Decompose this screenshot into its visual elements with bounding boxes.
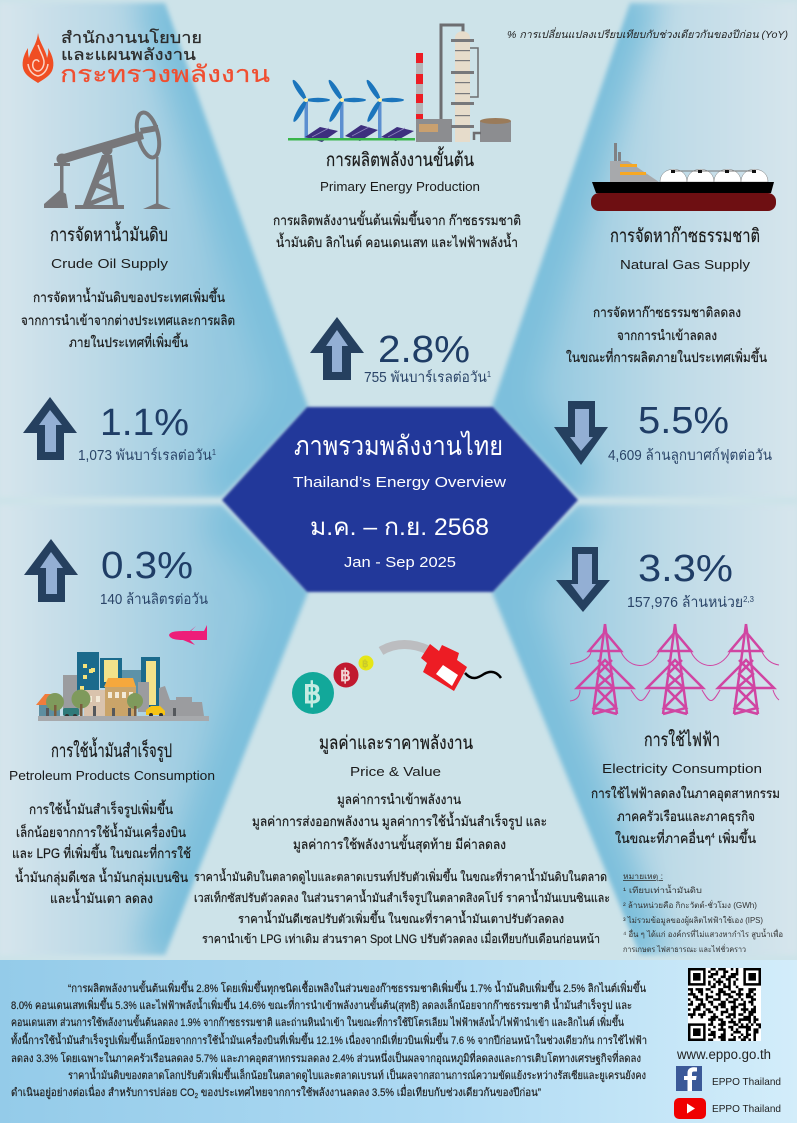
panel: natural gas background [490, 0, 704, 500]
stat: petroleum [100, 545, 208, 608]
icon: flame logo [23, 33, 53, 83]
text: electricity description: เพิ่มขึ้น [715, 828, 756, 846]
stat: crude oil [78, 402, 217, 464]
icon: wind turbines and solar [288, 79, 415, 142]
text: price description: ราคานำเข้า LPG เท่าเดิม ส่วนราคา Spot LNG ปรับตัวลดลง เมื่อเทียบกับเดือนก่อนหน้า [202, 930, 600, 946]
stat: petroleum: 0.3% [101, 545, 193, 587]
text: price description: ราคาน้ำมันดีเซลปรับตัวเพิ่มขึ้น ในขณะที่ราคาน้ำมันเตาปรับตัวลดลง [238, 910, 564, 926]
icon: LNG ship [591, 143, 776, 211]
panel: summary band [0, 960, 797, 1123]
icon: facebook [676, 1066, 702, 1091]
notes: ⁴ อื่น ๆ ได้แก่ องค์กรที่ไม่แสวงหากำไร สูบน้ำเพื่อ [623, 928, 783, 940]
heading: crude oil: การจัดหาน้ำมันดิบ [50, 221, 168, 245]
icon: baht coins and fuel nozzle: ฿ [362, 659, 368, 670]
panel: electricity background [490, 502, 704, 958]
QR code [688, 968, 761, 1041]
text: crude oil description: จากการนำเข้าจากต่างประเทศและการผลิต [21, 313, 235, 328]
text: summary: 2 [195, 1093, 198, 1100]
notes [623, 872, 783, 954]
text: crude oil description: การจัดหาน้ำมันดิบของประเทศเพิ่มขึ้น [33, 287, 225, 305]
stat: natural gas: 4,609 ล้านลูกบาศก์ฟุตต่อวัน [608, 447, 772, 464]
stat: crude oil: 1,073 พันบาร์เรลต่อวัน [78, 448, 221, 464]
icon: baht coins and fuel nozzle: ฿ [340, 666, 351, 685]
text: petroleum description: การใช้น้ำมันสำเร็จรูปเพิ่มขึ้น [29, 799, 173, 818]
text: petroleum description: และ LPG ที่เพิ่มขึ้น ในขณะที่การใช้ [12, 843, 191, 861]
notes: ³ ไม่รวมข้อมูลของผู้ผลิตไฟฟ้าใช้เอง (IPS) [623, 916, 763, 926]
hexagon period Thai: ม.ค. – ก.ย. 2568 [310, 514, 489, 541]
heading: natural gas: การจัดหาก๊าซธรรมชาติ [610, 225, 760, 246]
text: price description: ราคาน้ำมันดิบในตลาดดูไบและตลาดเบรนท์ปรับตัวเพิ่มขึ้น ในขณะที่ราคาน้ำมันดิบในตลาด [194, 868, 607, 885]
stat: electricity [627, 548, 755, 611]
notes: หมายเหตุ : [623, 872, 663, 881]
icon: arrow up petroleum [24, 539, 78, 602]
icon: baht coins and fuel nozzle [292, 644, 501, 714]
stat: electricity: 157,976 ล้านหน่วย [627, 595, 746, 611]
hexagon subtitle: Thailand’s Energy Overview [293, 474, 506, 491]
logo name line 1: สำนักงานนโยบาย [61, 28, 202, 47]
stat: primary [364, 329, 492, 386]
icon: power pylons [570, 624, 779, 714]
icon: arrow down electricity [556, 547, 610, 612]
stat: primary: 755 พันบาร์เรลต่อวัน [364, 370, 495, 386]
hexagon period English: Jan - Sep 2025 [344, 554, 456, 571]
logo name line 2: และแผนพลังงาน [61, 47, 196, 64]
text: primary energy description: การผลิตพลังงานขั้นต้นเพิ่มขึ้นจาก ก๊าซธรรมชาติ [273, 210, 521, 228]
text: electricity description: ในขณะที่ภาคอื่นๆ [615, 831, 719, 846]
text: value description: มูลค่าการใช้พลังงานขั้นสุดท้าย มีค่าลดลง [293, 834, 506, 853]
stat: crude oil: 1.1% [100, 402, 189, 444]
text: price description: เวสเท็กซัสปรับตัวลดลง ในส่วนราคาน้ำมันสำเร็จรูปในตลาดสิงคโปร์ ราคาน้ำมันเบนซินและ [194, 889, 610, 906]
central hexagon [222, 407, 578, 592]
panel: crude oil background [65, 0, 310, 500]
stat: crude oil: 1 [212, 448, 217, 457]
text: petroleum description: เล็กน้อยจากการใช้น้ำมันเครื่องบิน [16, 822, 186, 840]
hexagon title: ภาพรวมพลังงานไทย [294, 431, 503, 461]
text: summary [11, 980, 647, 1100]
stat: petroleum: 140 ล้านลิตรต่อวัน [100, 591, 208, 608]
stat: primary: 1 [487, 370, 492, 379]
text: crude oil description [21, 287, 235, 350]
icon: city [36, 652, 209, 721]
text: summary: 8.0% คอนเดนเสทเพิ่มขึ้น 5.3% และไฟฟ้าพลังน้ำเพิ่มขึ้น 14.6% ขณะที่การนำเข้าพลังงานขั้นต้น(สุทธิ) ลดลงเล็กน้อยจากก๊าซธรรมชาติ น้ำมันสำเร็จรูป และ [11, 997, 632, 1012]
icon: refinery [416, 25, 511, 142]
icon: arrow down gas [554, 401, 608, 465]
text: summary: คอนเดนเสท ส่วนการใช้พลังงานขั้นต้นลดลง 1.9% จากก๊าซธรรมชาติ และถ่านหินนำเข้า ในขณะที่การใช้ปิโตรเลียม ไฟฟ้าพลังน้ำ/ไฟฟ้านำเข้า และลิกไนต์ เพิ่มขึ้น [11, 1014, 624, 1029]
heading: primary energy: การผลิตพลังงานขั้นต้น [326, 146, 474, 170]
subheading: primary energy: Primary Energy Production [320, 179, 480, 194]
YoY note: % การเปลี่ยนแปลงเปรียบเทียบกับช่วงเดียวกันของปีก่อน (YoY) [507, 27, 788, 41]
stat: natural gas [608, 400, 772, 464]
heading: electricity: การใช้ไฟฟ้า [644, 729, 720, 750]
icon: airplane [169, 625, 207, 645]
subheading: price and value: Price & Value [350, 764, 441, 779]
text: summary: ลดลง 3.3% โดยเฉพาะในภาคครัวเรือนลดลง 5.7% และภาคอุตสาหกรรมลดลง 2.4% ส่วนหนึ่งเป็นผลจากอุณหภูมิที่ลดลงและการเติบโตทางเศรษฐกิจที่ลดลง [11, 1050, 641, 1065]
text: summary: ดำเนินอยู่อย่างต่อเนื่อง สำหรับการปล่อย CO [11, 1087, 219, 1099]
text: crude oil description: ภายในประเทศที่เพิ่มขึ้น [69, 332, 188, 350]
text: primary energy description [273, 210, 521, 250]
subheading: petroleum: Petroleum Products Consumption [9, 768, 215, 783]
text: value description [252, 792, 547, 853]
text: electricity description: ภาคครัวเรือนและภาคธุรกิจ [617, 809, 755, 825]
text: petroleum description: น้ำมันกลุ่มดีเซล น้ำมันกลุ่มเบนซิน [15, 867, 188, 886]
logo [23, 28, 270, 87]
text: summary: ของประเทศไทยจากการใช้พลังงานลดลง 3.5% เมื่อเทียบกับช่วงเดียวกันของปีก่อน” [198, 1084, 541, 1099]
text: summary: ราคาน้ำมันดิบของตลาดโลกปรับตัวเพิ่มขึ้นเล็กน้อยในตลาดดูไบและตลาดเบรนท์ เป็นผลจากสถานการณ์ความขัดแย้งระหว่างรัสเซียและยูเครนยังคง [68, 1067, 646, 1082]
icon: baht coins and fuel nozzle: ฿ [303, 678, 321, 710]
website: www.eppo.go.th [676, 1047, 771, 1062]
notes: ² ล้านหน่วยคือ กิกะวัตต์-ชั่วโมง (GWh) [623, 899, 757, 910]
label: youtube: EPPO Thailand [712, 1103, 781, 1115]
text: electricity description: 4 [711, 833, 715, 840]
text: primary energy description: น้ำมันดิบ ลิกไนต์ คอนเดนเสท และไฟฟ้าพลังน้ำ [276, 232, 518, 250]
icon: arrow up primary [310, 317, 364, 380]
subheading: natural gas: Natural Gas Supply [620, 257, 751, 272]
subheading: crude oil: Crude Oil Supply [51, 256, 169, 271]
text: petroleum description: และน้ำมันเตา ลดลง [50, 888, 153, 906]
text: natural gas description: ในขณะที่การผลิตภายในประเทศเพิ่มขึ้น [566, 347, 767, 365]
text: petroleum description [12, 799, 191, 906]
stat: natural gas: 5.5% [638, 400, 729, 442]
stat: primary: 2.8% [378, 329, 470, 371]
text: summary: ทั้งนี้การใช้น้ำมันสำเร็จรูปเพิ่มขึ้นเล็กน้อยจากการใช้น้ำมันเครื่องบินที่เพิ่มขึ้น 12.1% เนื่องจากมีเที่ยวบินเพิ่มขึ้น 7.6 % จากปีก่อนหน้าในช่วงเดียวกัน การใช้ไฟฟ้า [11, 1032, 647, 1047]
text: natural gas description [566, 305, 767, 365]
heading: price and value: มูลค่าและราคาพลังงาน [319, 732, 473, 754]
text: value description: มูลค่าการนำเข้าพลังงาน [337, 792, 461, 808]
text: price description [194, 868, 610, 946]
text: natural gas description: จากการนำเข้าลดลง [617, 328, 717, 343]
icon: pumpjack [44, 110, 171, 209]
stat: electricity: 2,3 [743, 595, 755, 604]
notes: การเกษตร ไฟสาธารณะ และไฟชั่วคราว [623, 943, 746, 954]
stat: electricity: 3.3% [638, 548, 733, 590]
icon: arrow up crude [23, 397, 77, 460]
text: summary: “การผลิตพลังงานขั้นต้นเพิ่มขึ้น 2.8% โดยเพิ่มขึ้นทุกชนิดเชื้อเพลิงในส่วนของก๊าซธรรมชาติเพิ่มขึ้น 1.7% น้ำมันดิบเพิ่มขึ้น 2.5% ลิกไนต์เพิ่มขึ้น [68, 980, 646, 995]
notes: ¹ เทียบเท่าน้ำมันดิบ [623, 884, 702, 895]
text: natural gas description: การจัดหาก๊าซธรรมชาติลดลง [593, 305, 741, 320]
logo ministry: กระทรวงพลังงาน [60, 61, 270, 87]
icon: youtube [674, 1098, 706, 1119]
label: facebook: EPPO Thailand [712, 1076, 781, 1088]
text: value description: มูลค่าการส่งออกพลังงาน มูลค่าการใช้น้ำมันสำเร็จรูป และ [252, 811, 547, 830]
heading: petroleum: การใช้น้ำมันสำเร็จรูป [51, 737, 172, 762]
subheading: electricity: Electricity Consumption [602, 761, 762, 776]
text: electricity description [591, 785, 780, 846]
panel: petroleum background [65, 502, 310, 958]
